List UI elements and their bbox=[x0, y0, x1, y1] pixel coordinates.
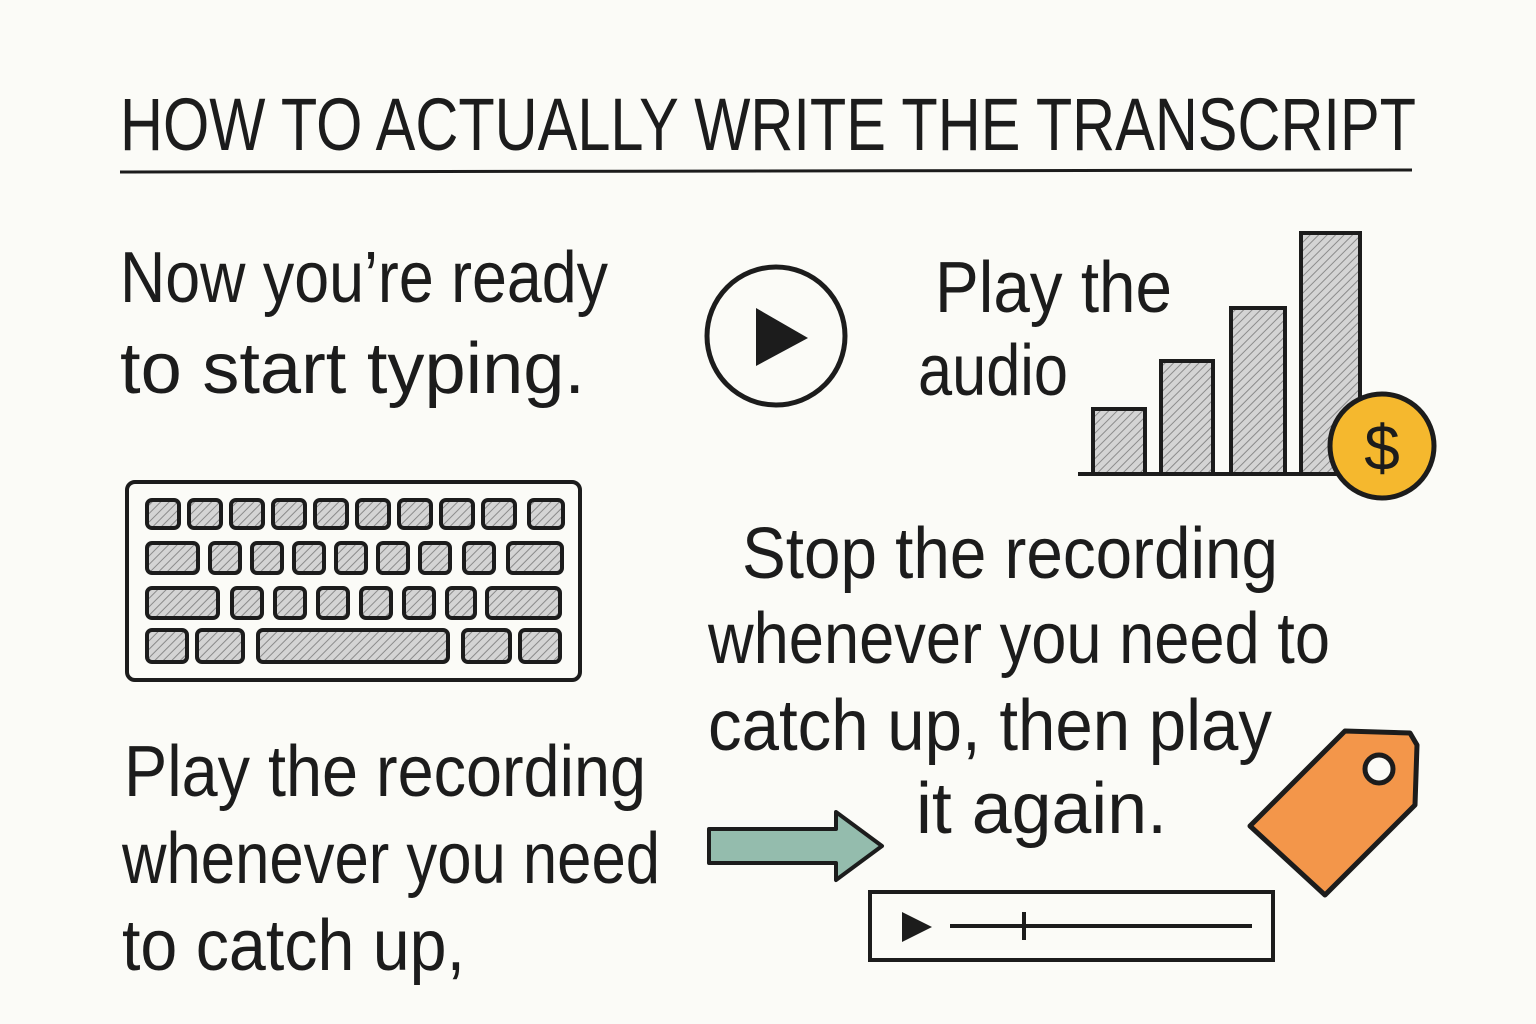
bar chart bbox=[1078, 233, 1362, 474]
text: stop the recording: whenever you need to bbox=[707, 599, 1330, 679]
text: stop the recording: catch up, then play bbox=[708, 686, 1272, 766]
icon: play button bbox=[707, 267, 845, 405]
icon: price tag bbox=[1250, 731, 1417, 895]
icon: keyboard bbox=[127, 482, 580, 680]
text: play the recording: whenever you need bbox=[121, 819, 660, 899]
text: play the audio bbox=[918, 248, 1172, 411]
icon: dollar coin: $ bbox=[1364, 412, 1400, 484]
text: play the recording bbox=[121, 732, 660, 986]
text: play the audio: Play the bbox=[935, 248, 1172, 328]
text: now you're ready: to start typing. bbox=[120, 329, 585, 409]
arrow bbox=[709, 812, 882, 880]
text: stop the recording: Stop the recording bbox=[742, 514, 1278, 594]
text: now you're ready bbox=[120, 238, 608, 409]
text: stop the recording bbox=[707, 514, 1330, 849]
icon: dollar coin bbox=[1330, 394, 1434, 498]
text: play the recording: Play the recording bbox=[124, 732, 646, 812]
text: now you're ready: Now you’re ready bbox=[120, 238, 608, 318]
text: play the audio: audio bbox=[918, 331, 1068, 411]
icon: audio player bar bbox=[870, 892, 1273, 960]
text: play the recording: to catch up, bbox=[122, 906, 465, 986]
text: stop the recording: it again. bbox=[916, 769, 1167, 849]
